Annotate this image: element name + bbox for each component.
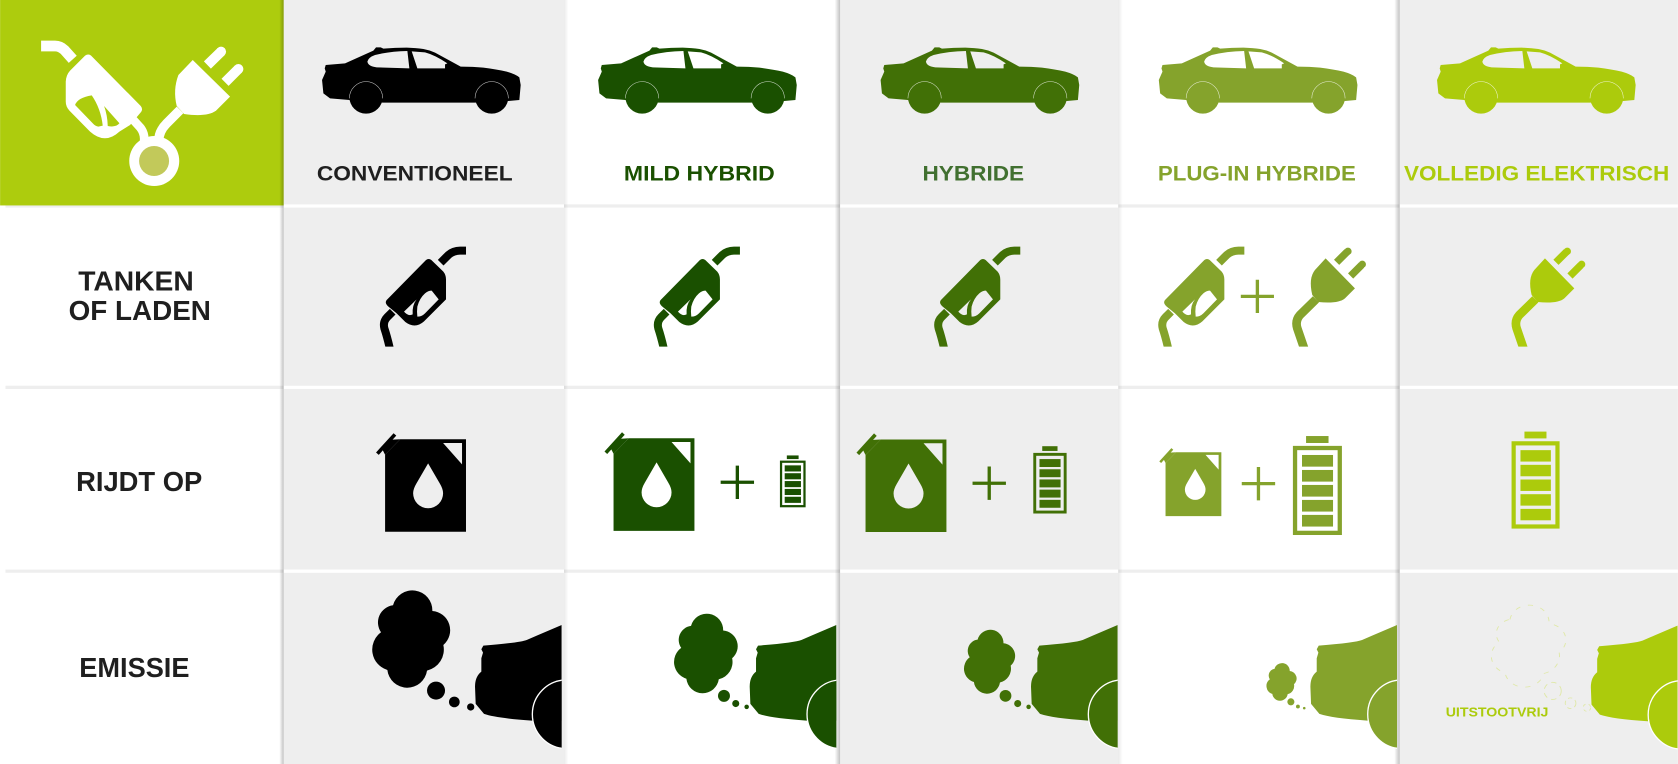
heading: plug-in hybride with car: PLUG-IN HYBRIDE [1158, 161, 1356, 185]
heading: mild hybrid with car [598, 47, 797, 185]
heading: hybride with car [881, 47, 1079, 185]
icon: jerrycan plus small battery, mild hybrid [606, 433, 804, 531]
heading: plug-in hybride with car [1158, 47, 1357, 185]
panel: green header tile [0, 0, 284, 205]
icon: jerrycan conventioneel [377, 434, 466, 532]
emission: medium cloud mild hybrid [674, 614, 876, 749]
heading: volledig elektrisch with car: VOLLEDIG ELEKTRISCH [1404, 161, 1669, 185]
row label: tanken of laden: OF LADEN [69, 295, 211, 326]
icon: plug volledig elektrisch [1516, 248, 1585, 351]
icon: fuel pump plus plug, plug-in hybride [1162, 248, 1366, 351]
heading: hybride with car: HYBRIDE [922, 161, 1024, 185]
row label: tanken of laden: TANKEN [78, 265, 194, 296]
icon: fuel nozzle and plug joined in a ring [41, 46, 243, 186]
row label: rijdt op: RIJDT OP [76, 466, 202, 497]
icon: small jerrycan plus large battery, plug-in hybride [1160, 436, 1340, 533]
emission: dashed empty cloud volledig elektrisch [1491, 605, 1678, 749]
heading: conventioneel with car [317, 47, 521, 185]
emission: tiny cloud plug-in hybride [1266, 625, 1436, 749]
row label: emissie: EMISSIE [79, 652, 189, 683]
emission: large cloud conventioneel [372, 590, 601, 749]
panel: conventioneel column [284, 0, 564, 764]
panel: hybride column [840, 0, 1118, 764]
panel: volledig elektrisch column [1400, 0, 1678, 764]
icon: battery volledig elektrisch [1514, 432, 1557, 526]
label: uitstootvrij: UITSTOOTVRIJ [1446, 705, 1548, 720]
icon: fuel pump hybride [938, 251, 1020, 351]
heading: mild hybrid with car: MILD HYBRID [624, 161, 775, 185]
heading: conventioneel with car: CONVENTIONEEL [317, 161, 513, 185]
icon: fuel pump conventioneel [384, 251, 466, 351]
heading: volledig elektrisch with car [1404, 47, 1669, 185]
emission: smaller cloud hybride [964, 625, 1157, 749]
icon: jerrycan plus medium battery, hybride [858, 435, 1065, 532]
icon: fuel pump mild hybrid [658, 251, 740, 351]
